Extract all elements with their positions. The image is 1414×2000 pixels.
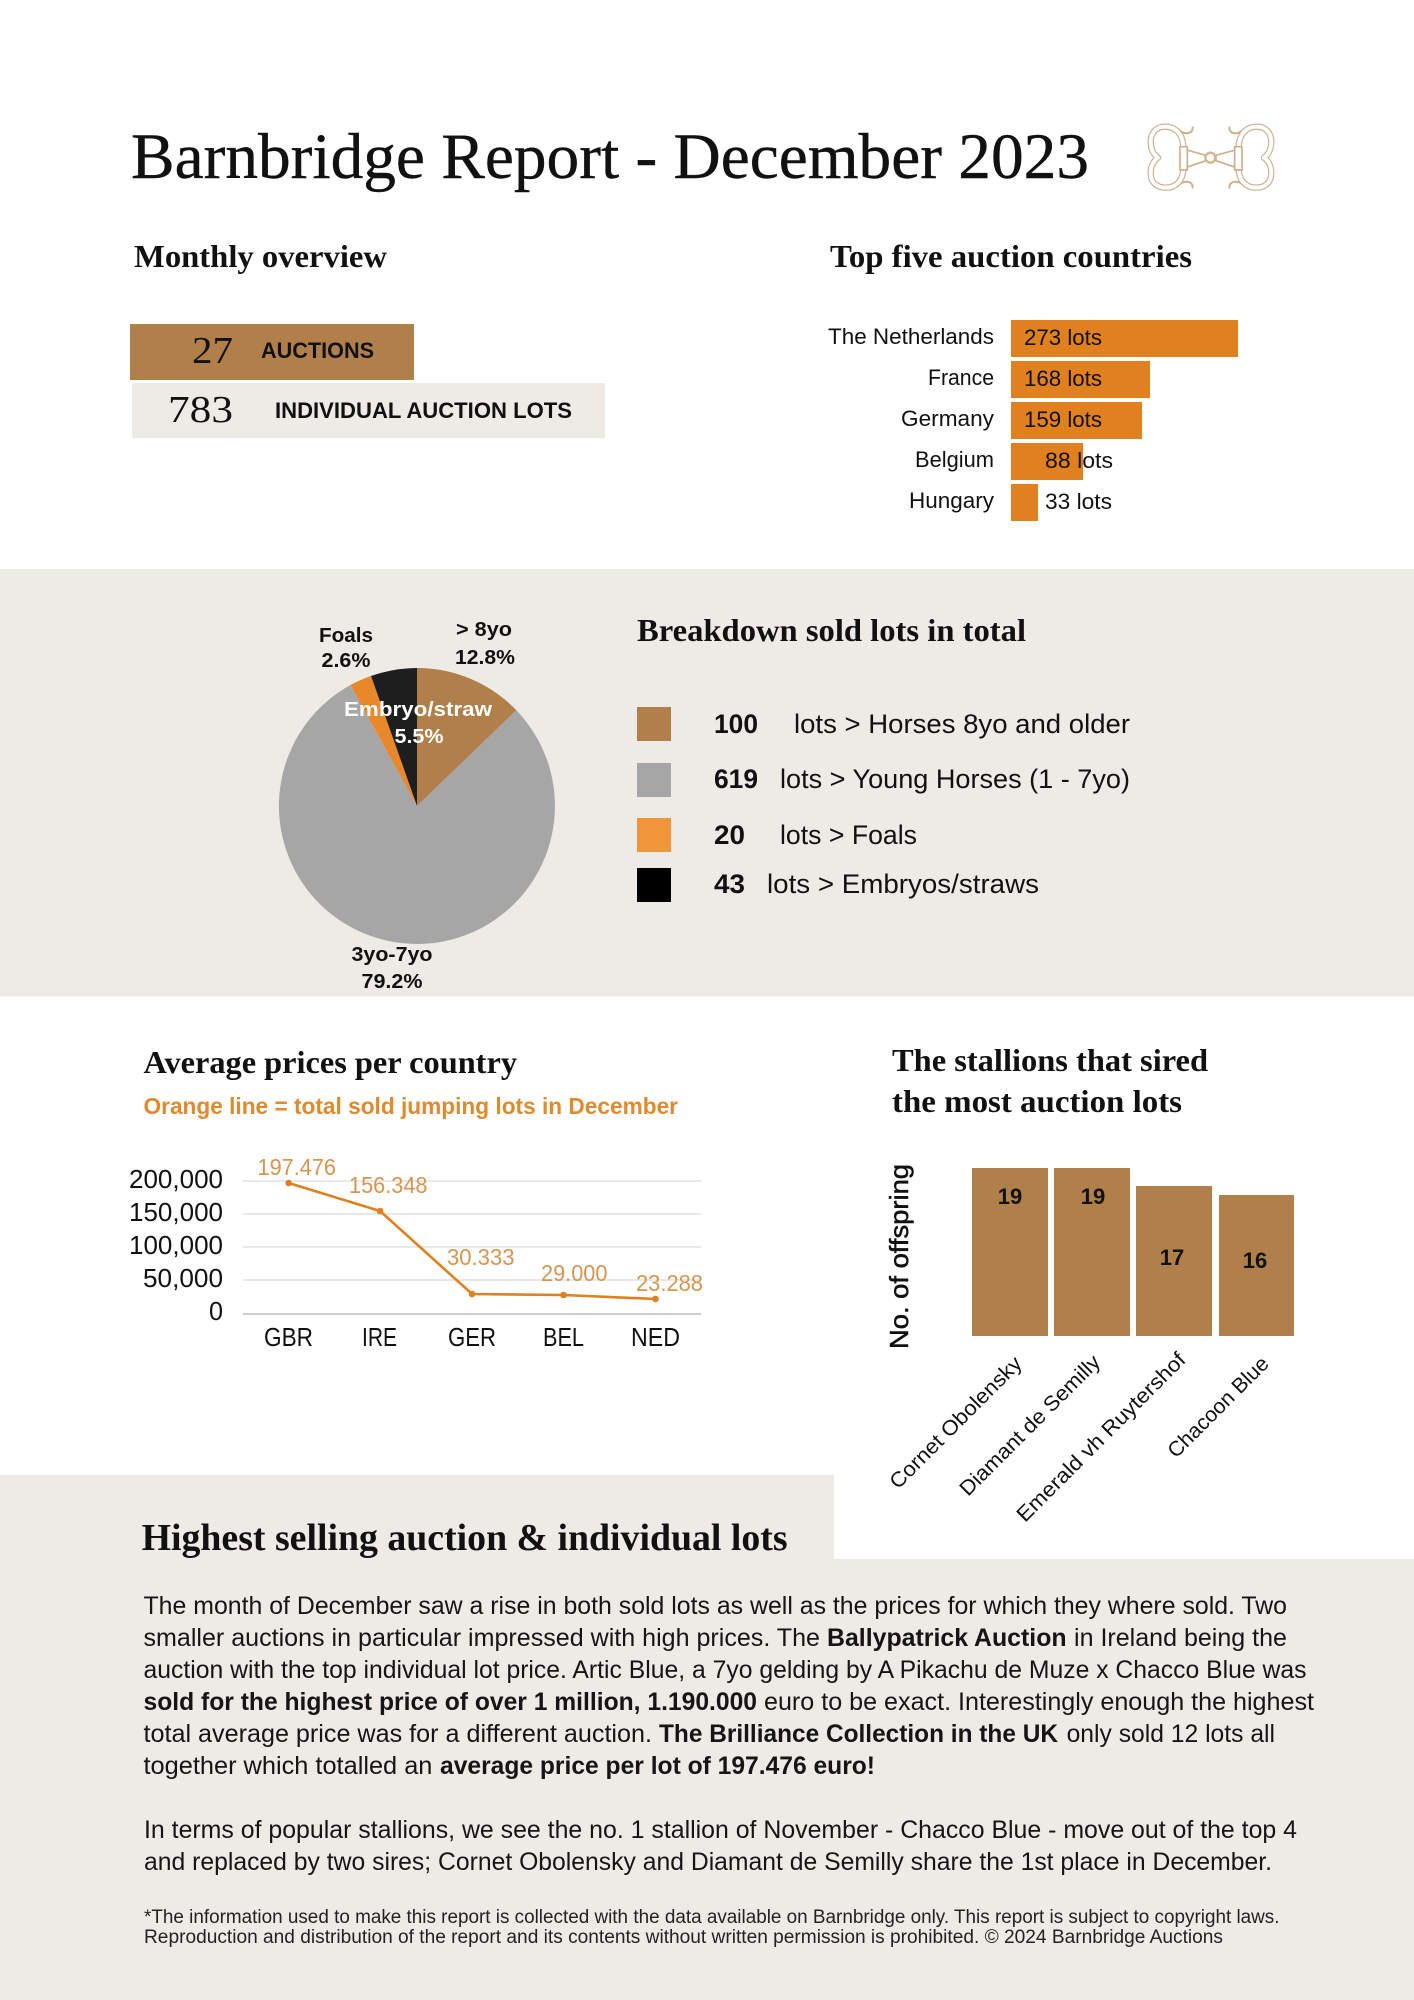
line chart: average prices: 23.288 xyxy=(636,1270,703,1296)
bar chart: countries: 168 lots xyxy=(1024,366,1102,391)
bar chart: countries: 33 lots xyxy=(1045,489,1112,514)
legend row: foals: lots > Foals xyxy=(780,820,917,850)
panel: highest selling text xyxy=(142,1517,1314,1948)
heading: breakdown sold lots: Breakdown sold lots in total xyxy=(637,612,1026,648)
heading: stallions that sired the most lots: The stallions that sired xyxy=(892,1042,1208,1078)
bar chart: countries xyxy=(828,320,1238,521)
bar chart: number of offspring: Emerald vh Ruytershof xyxy=(1012,1348,1191,1527)
stat: auctions: AUCTIONS xyxy=(261,338,374,363)
text block: first paragraph: together which totalled an xyxy=(144,1752,432,1780)
heading: highest selling auction and individual lots: Highest selling auction & individual lots xyxy=(142,1517,788,1559)
legend row: young horses: lots > Young Horses (1 - 7yo) xyxy=(780,764,1130,794)
pie chart: lots breakdown: 5.5% xyxy=(394,726,444,748)
heading: stallions that sired the most lots xyxy=(892,1042,1208,1119)
bar chart: countries: The Netherlands xyxy=(828,324,994,349)
text block: first paragraph: Ballypatrick Auction xyxy=(827,1624,1067,1652)
bar chart: countries: 159 lots xyxy=(1024,407,1102,432)
panel: average prices per country xyxy=(129,1044,703,1352)
text block: first paragraph xyxy=(144,1592,1314,1780)
text block: first paragraph: The Brilliance Collection in the UK xyxy=(659,1720,1058,1748)
text block: first paragraph: average price per lot of 197.476 euro! xyxy=(440,1752,875,1780)
text block: first paragraph: sold for the highest price of over 1 million, 1.190.000 xyxy=(144,1688,757,1716)
text block: first paragraph: in Ireland being the xyxy=(1074,1624,1287,1652)
bar chart: countries: France xyxy=(928,365,994,390)
line chart: average prices: 50,000 xyxy=(143,1263,223,1293)
bar chart: number of offspring: 17 xyxy=(1160,1245,1184,1270)
bar chart: countries: 88 lots xyxy=(1045,448,1113,473)
text block: footnote xyxy=(144,1907,1280,1948)
text block: footnote: *The information used to make this report is collected with the data available on Barnbridge only. This report is subject to copyright laws. xyxy=(144,1907,1280,1928)
pie chart: lots breakdown: 2.6% xyxy=(322,650,371,672)
text block: second paragraph: and replaced by two sires; Cornet Obolensky and Diamant de Semilly share the 1st place in December. xyxy=(144,1848,1272,1876)
legend row: young horses: 619 xyxy=(714,764,758,794)
line chart: average prices: BEL xyxy=(543,1322,584,1352)
bar chart: number of offspring: 16 xyxy=(1243,1248,1267,1273)
bar chart: countries: Hungary xyxy=(909,488,994,513)
legend row: embryos and straws: 43 xyxy=(714,869,745,899)
bar chart: number of offspring: No. of offspring xyxy=(884,1164,914,1349)
pie chart: lots breakdown: 79.2% xyxy=(362,971,423,993)
line chart: average prices: GER xyxy=(448,1322,496,1352)
line chart: average prices: 156.348 xyxy=(349,1172,428,1198)
line chart: average prices: 100,000 xyxy=(129,1230,223,1260)
bar chart: number of offspring: Chacoon Blue xyxy=(1163,1352,1274,1463)
bar chart: number of offspring: Cornet Obolensky xyxy=(885,1352,1027,1494)
bar chart: number of offspring: Diamant de Semilly xyxy=(955,1350,1106,1501)
panel: stallions xyxy=(884,1042,1294,1527)
line chart: average prices: NED xyxy=(631,1322,680,1352)
bar chart: countries: Germany xyxy=(901,406,994,431)
line chart: average prices xyxy=(129,1154,703,1352)
line chart: average prices: 30.333 xyxy=(447,1244,514,1270)
text block: first paragraph: only sold 12 lots all xyxy=(1067,1720,1275,1748)
line chart: average prices: 200,000 xyxy=(129,1164,223,1194)
heading: top five auction countries: Top five auction countries xyxy=(830,238,1192,274)
pie chart: lots breakdown: Embryo/straw xyxy=(344,699,492,721)
legend row: horses 8yo and older xyxy=(637,707,1130,741)
line chart: average prices: 197.476 xyxy=(258,1154,336,1180)
bar chart: number of offspring xyxy=(884,1164,1294,1527)
legend row: foals xyxy=(637,818,917,852)
legend row: young horses xyxy=(637,763,1130,797)
stat: individual auction lots: 783 xyxy=(168,389,233,431)
text block: first paragraph: auction with the top individual lot price. Artic Blue, a 7yo gelding by A Pikachu de Muze x Chacco Blue was xyxy=(144,1656,1306,1684)
panel: breakdown background xyxy=(0,569,1414,996)
text block: first paragraph: euro to be exact. Interestingly enough the highest xyxy=(764,1688,1314,1716)
text block: second paragraph: In terms of popular stallions, we see the no. 1 stallion of November - Chacco Blue - move out of the top 4 xyxy=(144,1816,1297,1844)
stat: auctions xyxy=(130,324,414,380)
legend row: foals: 20 xyxy=(714,820,745,850)
icon: horse bit logo xyxy=(1151,127,1271,188)
heading: monthly overview: Monthly overview xyxy=(134,238,387,274)
panel: monthly overview xyxy=(130,238,605,438)
panel: breakdown legend xyxy=(637,612,1130,902)
bar chart: countries: 273 lots xyxy=(1024,325,1102,350)
line chart: average prices: 150,000 xyxy=(129,1197,223,1227)
heading: stallions that sired the most lots: the most auction lots xyxy=(892,1083,1182,1119)
text block: first paragraph: The month of December saw a rise in both sold lots as well as the prices for which they where sold. Two xyxy=(144,1592,1287,1620)
pie chart: lots breakdown xyxy=(279,619,555,993)
heading: average prices: Average prices per country xyxy=(144,1044,517,1080)
pie chart: lots breakdown: 3yo-7yo xyxy=(352,944,432,966)
bar chart: number of offspring: 19 xyxy=(998,1184,1022,1209)
pie chart: lots breakdown: 12.8% xyxy=(455,647,515,669)
legend row: embryos and straws: lots > Embryos/straws xyxy=(767,869,1039,899)
subtitle: orange line note: Orange line = total sold jumping lots in December xyxy=(144,1093,678,1119)
line chart: average prices: GBR xyxy=(264,1322,313,1352)
text block: first paragraph: total average price was for a different auction. xyxy=(144,1720,652,1748)
panel: top five auction countries xyxy=(828,238,1238,521)
line chart: average prices: 0 xyxy=(209,1296,223,1326)
legend row: horses 8yo and older: 100 xyxy=(714,709,758,739)
line chart: average prices: IRE xyxy=(362,1322,397,1352)
panel: bottom background xyxy=(0,1475,1414,2000)
bar chart: countries: Belgium xyxy=(915,447,994,472)
pie chart: lots breakdown: > 8yo xyxy=(456,619,512,641)
stat: individual auction lots xyxy=(132,383,605,438)
legend row: horses 8yo and older: lots > Horses 8yo and older xyxy=(794,709,1130,739)
bar chart: number of offspring: 19 xyxy=(1081,1184,1105,1209)
text block: first paragraph: smaller auctions in particular impressed with high prices. The xyxy=(144,1624,820,1652)
pie chart: lots breakdown: Foals xyxy=(319,625,373,647)
line chart: average prices: 29.000 xyxy=(541,1260,608,1286)
text block: footnote: Reproduction and distribution of the report and its contents without written permission is prohibited. © 2024 Barnbridge Auctions xyxy=(144,1927,1223,1948)
stat: auctions: 27 xyxy=(192,330,233,372)
legend row: embryos and straws xyxy=(637,868,1039,902)
text block: second paragraph xyxy=(144,1816,1297,1876)
stat: individual auction lots: INDIVIDUAL AUCTION LOTS xyxy=(275,398,572,423)
title: Barnbridge Report - December 2023 xyxy=(131,121,1089,193)
